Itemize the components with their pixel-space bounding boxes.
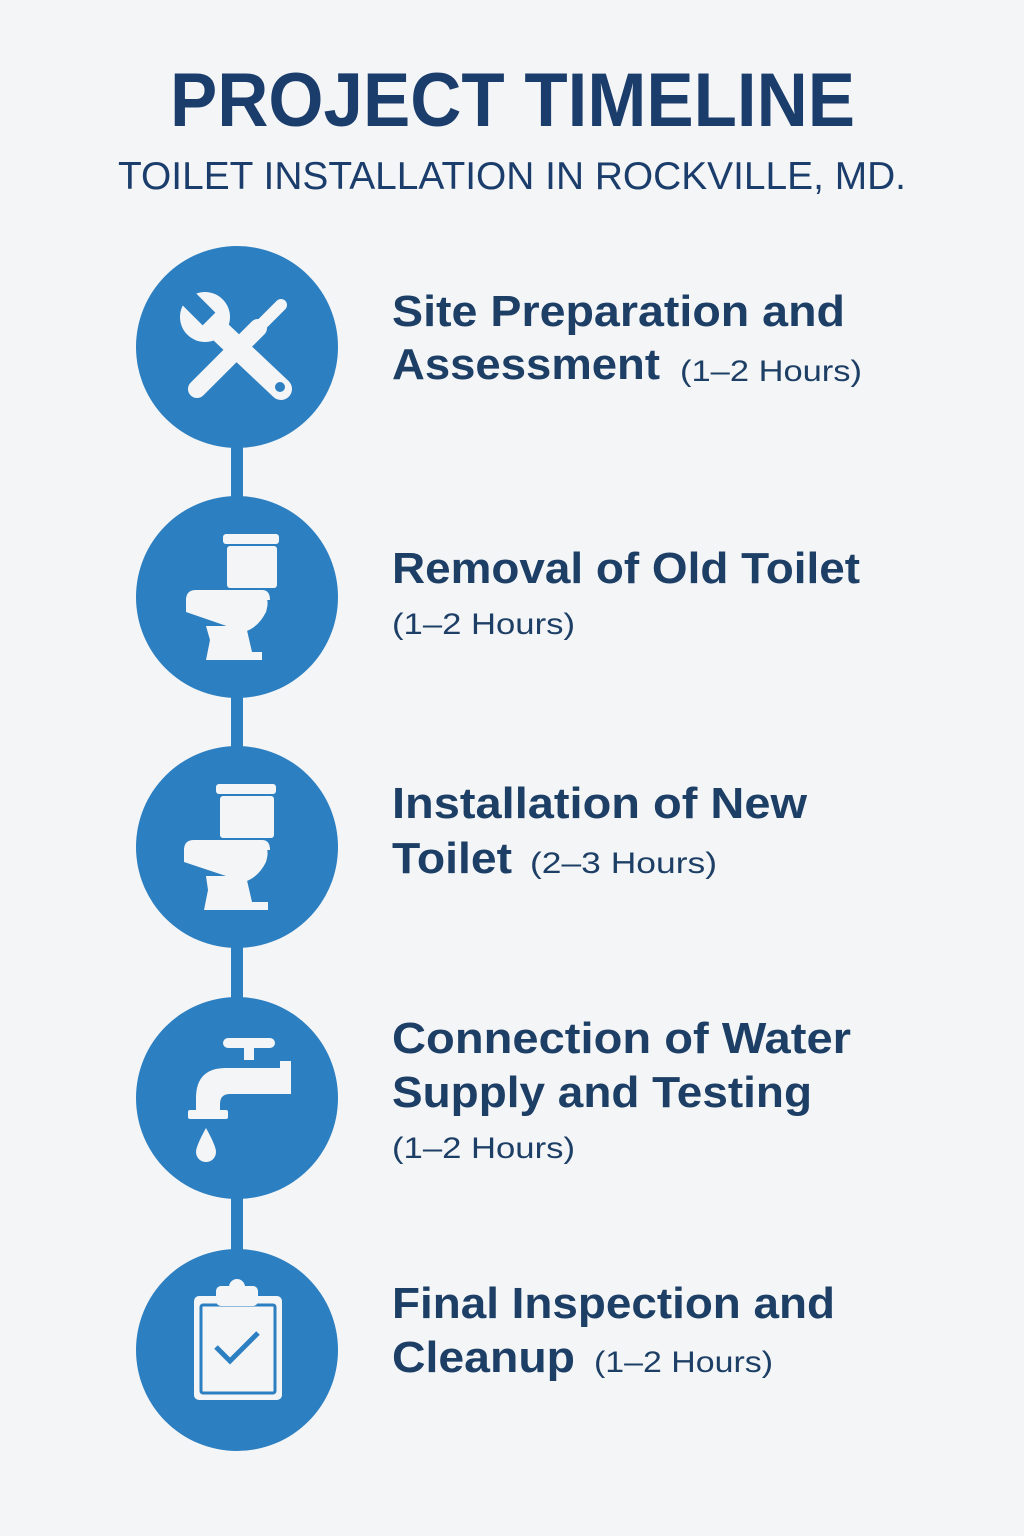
title: PROJECT TIMELINE bbox=[170, 58, 855, 143]
step 4 text: Supply and Testing bbox=[392, 1068, 812, 1117]
step 5 text bbox=[392, 1279, 835, 1382]
step 1 circle: wrench and screwdriver bbox=[136, 246, 338, 448]
step 2 circle: toilet bbox=[136, 496, 338, 698]
step 3 text: Installation of New bbox=[392, 779, 808, 828]
timeline connector bbox=[231, 440, 243, 1260]
step 5 circle: clipboard bbox=[136, 1249, 338, 1451]
step 1 text bbox=[392, 287, 862, 389]
step 5 text: (1–2 Hours) bbox=[594, 1346, 773, 1379]
step 3 text bbox=[392, 779, 808, 883]
step 1 text: (1–2 Hours) bbox=[680, 355, 862, 388]
step 3 text: (2–3 Hours) bbox=[530, 847, 717, 880]
step 3 text: Toilet bbox=[392, 834, 512, 883]
step 2 text bbox=[392, 544, 860, 641]
step 2 text: Removal of Old Toilet bbox=[392, 544, 860, 593]
step 2 text: (1–2 Hours) bbox=[392, 608, 575, 641]
step 4 circle: faucet bbox=[136, 997, 338, 1199]
step 4 text bbox=[392, 1014, 851, 1165]
subtitle: TOILET INSTALLATION IN ROCKVILLE, MD. bbox=[118, 155, 906, 198]
step 4 text: (1–2 Hours) bbox=[392, 1132, 575, 1165]
step 5 text: Cleanup bbox=[392, 1333, 575, 1382]
step 5 text: Final Inspection and bbox=[392, 1279, 835, 1328]
step 1 text: Assessment bbox=[392, 340, 660, 389]
step 3 circle: toilet bbox=[136, 746, 338, 948]
step 4 text: Connection of Water bbox=[392, 1014, 851, 1063]
step 1 text: Site Preparation and bbox=[392, 287, 845, 336]
